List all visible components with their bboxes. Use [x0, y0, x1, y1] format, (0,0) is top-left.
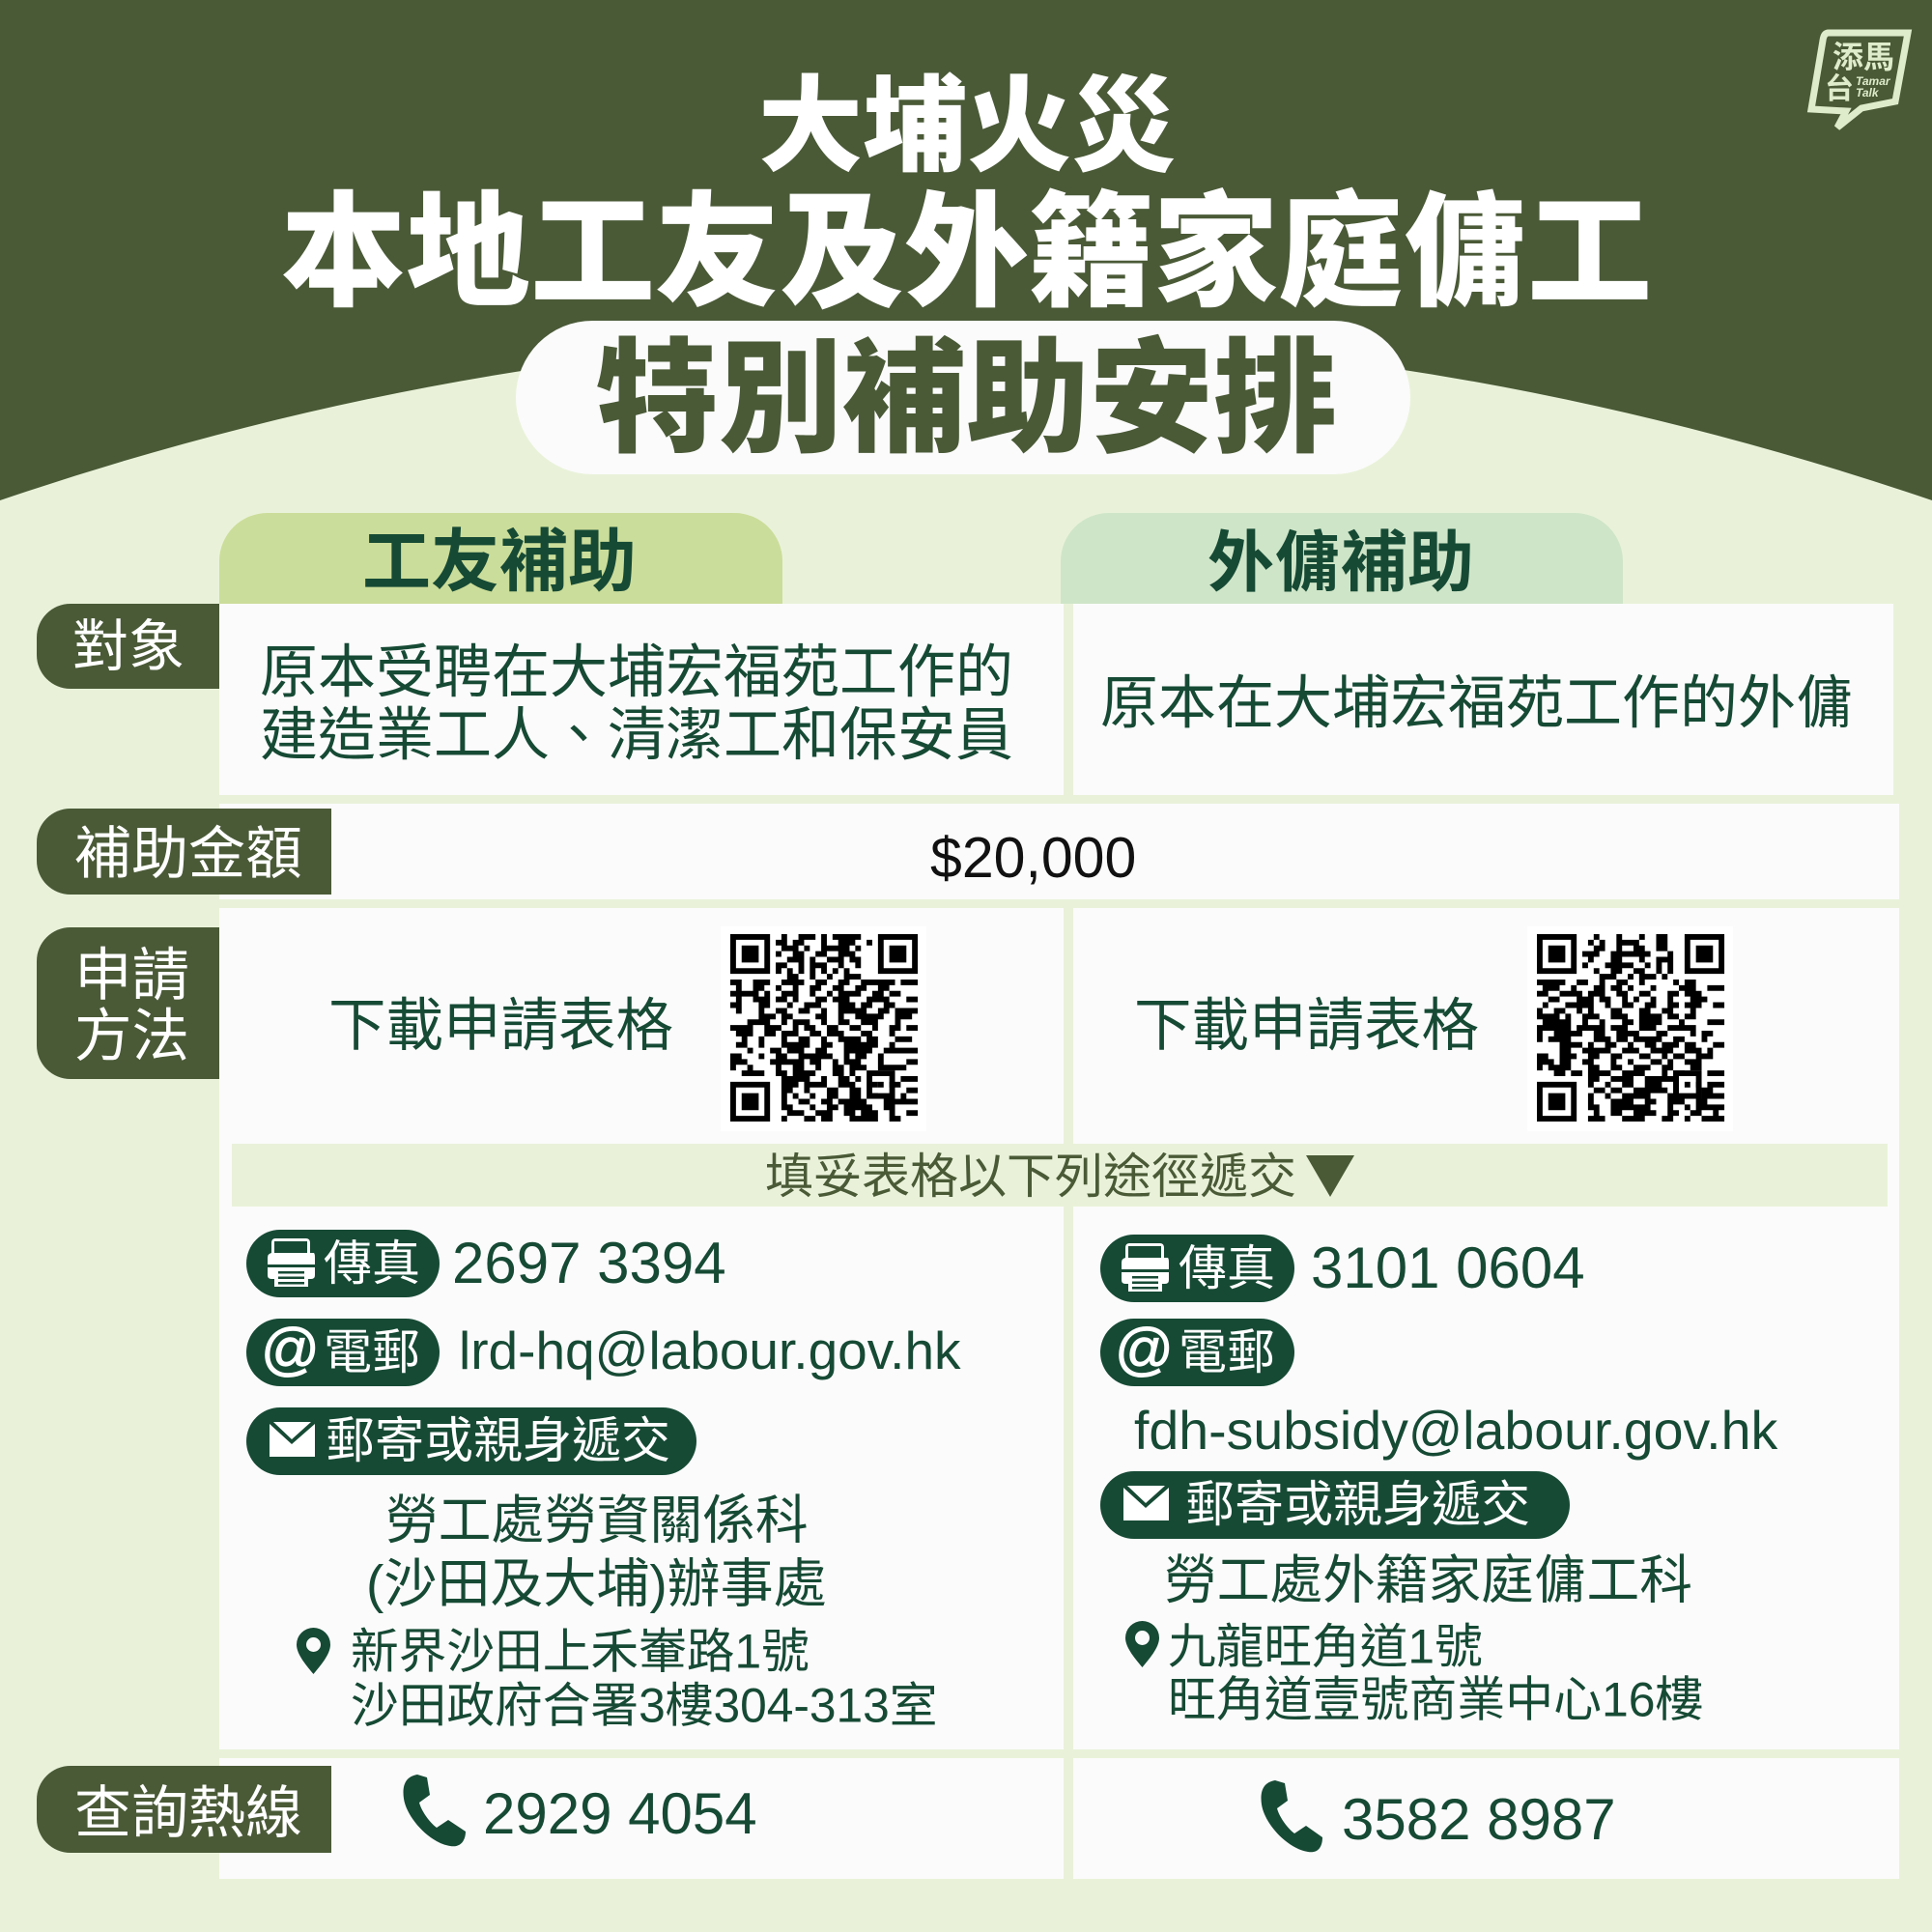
fax contact, workers: 傳真 — [324, 1236, 420, 1291]
icon: printer — [268, 1238, 315, 1287]
row label: eligibility — [37, 604, 219, 689]
email contact, workers: 電郵 — [324, 1325, 420, 1379]
panel: subsidy amount: $20,000 — [930, 826, 1136, 890]
panel: hotline, helpers — [1073, 1758, 1899, 1879]
QR code, workers — [721, 926, 926, 1131]
panel: subsidy amount — [219, 804, 1899, 899]
fax number: 2697 3394 — [452, 1231, 726, 1295]
tab: domestic helper subsidy: 外傭補助 — [1208, 526, 1474, 600]
email address: lrd-hq@labour.gov.hk — [459, 1321, 961, 1380]
email contact, workers — [246, 1317, 961, 1386]
address, helpers: 九龍旺角道1號 — [1168, 1619, 1483, 1673]
QR code, helpers — [1527, 926, 1733, 1131]
panel: eligibility, helpers: 原本在大埔宏福苑工作的外傭 — [1100, 670, 1854, 736]
row label: enquiry hotline: 查詢熱線 — [74, 1781, 302, 1845]
address, workers: (沙田及大埔)辦事處 — [366, 1553, 827, 1613]
logo: Tamar Talk speech bubble — [1811, 33, 1908, 128]
title — [281, 68, 1652, 323]
address, workers: 新界沙田上禾輋路1號 — [351, 1625, 810, 1679]
row label: subsidy amount: 補助金額 — [74, 822, 302, 886]
logo: Tamar Talk speech bubble: 台 — [1825, 72, 1854, 105]
icon: telephone — [1262, 1780, 1322, 1852]
hotline number: 2929 4054 — [483, 1781, 757, 1846]
row label: application method: 申請 — [74, 943, 189, 1008]
icon: location pin — [1125, 1621, 1159, 1667]
post or in person, workers: 郵寄或親身遞交 — [326, 1413, 670, 1468]
logo: Tamar Talk speech bubble: 添馬 — [1833, 40, 1894, 74]
fax number: 3101 0604 — [1311, 1236, 1585, 1300]
row label: application method — [37, 927, 219, 1079]
tab: domestic helper subsidy — [1061, 513, 1623, 604]
tab: worker subsidy — [219, 513, 782, 604]
fax contact, helpers: 傳真 — [1179, 1241, 1275, 1295]
header background with curved lower edge — [0, 0, 1932, 500]
email address: fdh-subsidy@labour.gov.hk — [1134, 1401, 1777, 1461]
address, workers: 沙田政府合署3樓304-313室 — [351, 1679, 937, 1733]
email contact, workers: @ — [261, 1317, 320, 1381]
fax contact, helpers — [1100, 1235, 1585, 1302]
instructions strip — [232, 1144, 1888, 1207]
panel: eligibility, workers: 建造業工人、清潔工和保安員 — [260, 703, 1013, 767]
post or in person, helpers — [1100, 1471, 1570, 1539]
title line 1: 大埔火災 — [758, 68, 1176, 185]
hotline number: 3582 8987 — [1342, 1787, 1616, 1852]
panel: hotline, workers — [219, 1758, 1064, 1879]
icon: printer — [1122, 1243, 1169, 1292]
post or in person, helpers: 郵寄或親身遞交 — [1185, 1477, 1530, 1532]
panel: eligibility, helpers — [1073, 604, 1893, 795]
post or in person, workers — [246, 1407, 696, 1475]
row label: enquiry hotline — [37, 1766, 331, 1853]
email contact, helpers — [1100, 1317, 1777, 1461]
download form text, helpers: 下載申請表格 — [1134, 993, 1479, 1058]
address, workers: 勞工處勞資關係科 — [385, 1490, 808, 1549]
instructions strip: 填妥表格以下列途徑遞交 — [765, 1150, 1296, 1204]
address, helpers — [1125, 1549, 1703, 1727]
panel: application method, workers — [219, 908, 1064, 1749]
panel: eligibility, workers: 原本受聘在大埔宏福苑工作的 — [260, 639, 1013, 705]
logo: Tamar Talk speech bubble: Talk — [1856, 86, 1880, 99]
title line 2: 本地工友及外籍家庭傭工 — [281, 184, 1652, 323]
icon: envelope — [1123, 1486, 1169, 1520]
row label: eligibility: 對象 — [72, 615, 185, 678]
panel: application method, helpers — [1073, 908, 1899, 1749]
icon: location pin — [297, 1628, 330, 1674]
address, workers — [297, 1490, 937, 1733]
subtitle pill: 特別補助安排 — [595, 330, 1337, 469]
row label: subsidy amount — [37, 809, 331, 895]
email contact, helpers: @ — [1115, 1317, 1174, 1381]
icon: envelope — [270, 1422, 315, 1457]
address, helpers: 旺角道壹號商業中心16樓 — [1168, 1673, 1703, 1727]
icon: telephone — [404, 1775, 466, 1846]
download form text, workers: 下載申請表格 — [328, 993, 673, 1058]
row label: application method: 方法 — [74, 1004, 189, 1068]
email contact, helpers: 電郵 — [1179, 1325, 1275, 1379]
address, helpers: 勞工處外籍家庭傭工科 — [1164, 1549, 1692, 1609]
panel: eligibility, workers — [219, 604, 1064, 795]
tab: worker subsidy: 工友補助 — [362, 525, 637, 601]
fax contact, workers — [246, 1230, 726, 1297]
logo: Tamar Talk speech bubble: Tamar — [1856, 74, 1891, 88]
